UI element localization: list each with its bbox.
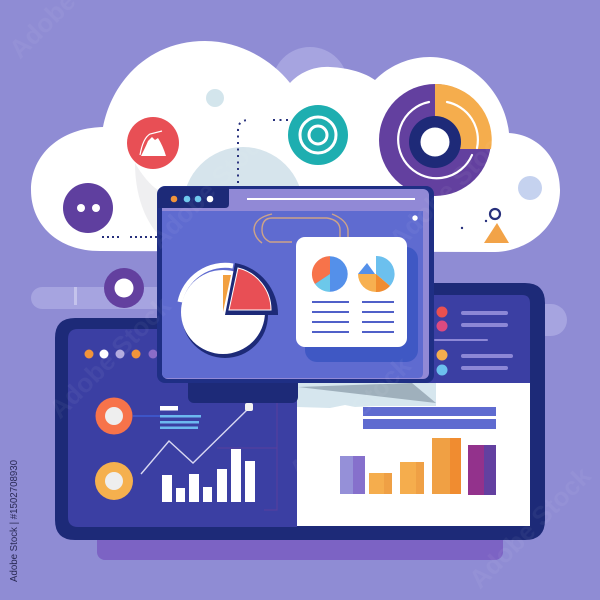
heading bars [363, 407, 496, 429]
tan outline shape [254, 214, 348, 243]
dotted connector left [102, 236, 158, 238]
mini pie left [312, 256, 348, 292]
icon: triangle and ring [461, 209, 509, 243]
watermark: Adobe Stock [43, 290, 177, 424]
pale periwinkle dot [518, 176, 542, 200]
bar chart left [162, 449, 255, 502]
pale blue dot [206, 89, 224, 107]
pie chart [180, 263, 278, 358]
bar chart right [340, 438, 496, 495]
icon: donut chart [379, 84, 492, 196]
watermark: Adobe Stock [283, 350, 417, 484]
white chart panel [297, 383, 530, 526]
monitor [55, 283, 545, 540]
cloud [31, 41, 560, 252]
pale blue semicircle behind window [183, 147, 303, 267]
watermark: Adobe Stock [463, 460, 597, 594]
watermark: Adobe Stock [143, 120, 277, 254]
dotted connector top [238, 120, 290, 183]
icon: red mountain [127, 117, 179, 169]
icon: orange ring [96, 398, 132, 434]
text lines [312, 301, 394, 333]
legend lines [133, 406, 201, 429]
icon: teal target [288, 105, 348, 165]
side credit text: Adobe Stock | #1502708930 [9, 460, 20, 582]
address line [247, 198, 415, 200]
report card [296, 237, 418, 362]
monitor frame [55, 283, 545, 540]
window frame [157, 186, 434, 383]
small white dot [412, 215, 418, 221]
browser window [157, 186, 434, 383]
right top panel [400, 295, 530, 383]
watermark: Adobe Stock [383, 120, 517, 254]
pale background blob [272, 47, 348, 123]
status dots [84, 350, 158, 358]
icon: yellow ring [95, 462, 133, 500]
grey swoosh on cloud [135, 163, 158, 234]
left dark panel [68, 329, 297, 527]
mini pie right [358, 256, 395, 292]
icon: purple ring [104, 268, 144, 308]
title tab [158, 187, 229, 208]
window shadow [188, 375, 298, 403]
bottom purple band [97, 525, 503, 560]
pale horizontal pill [31, 287, 567, 336]
line chart [141, 403, 253, 474]
icon: purple face circle [63, 183, 113, 233]
